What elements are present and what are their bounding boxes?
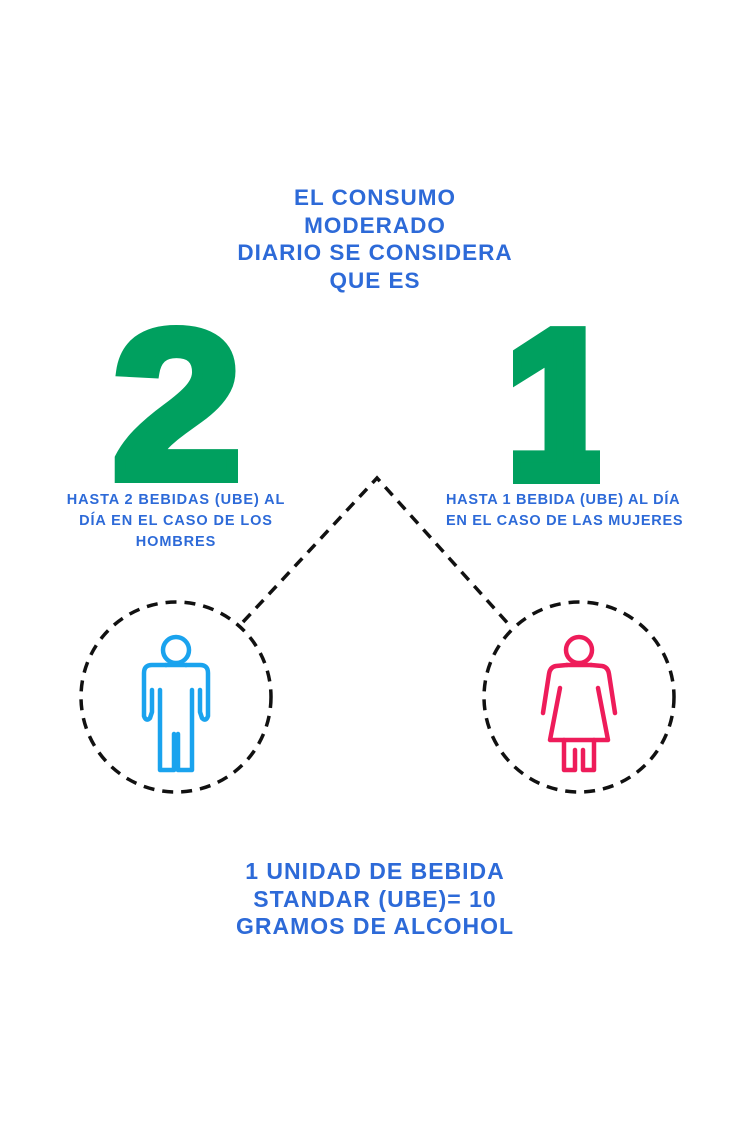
- dashed circle: women: [484, 602, 674, 792]
- title: MODERADO: [304, 212, 446, 238]
- caption: men: DÍA EN EL CASO DE LOS: [79, 513, 273, 529]
- title: QUE ES: [329, 268, 421, 292]
- icon: woman: [543, 637, 615, 770]
- footer note: 1 UNIDAD DE BEBIDA: [245, 858, 505, 884]
- icon: man: [144, 637, 208, 770]
- caption: men: HOMBRES: [136, 534, 216, 550]
- number 2: 2: [112, 287, 242, 524]
- caption: men: HASTA 2 BEBIDAS (UBE) AL: [67, 492, 285, 508]
- caption: men: [67, 492, 285, 550]
- footer note: STANDAR (UBE)= 10: [253, 886, 497, 912]
- caption: women: EN EL CASO DE LAS MUJERES: [446, 513, 683, 529]
- dashed circle: men: [81, 602, 271, 792]
- caption: women: [446, 490, 683, 529]
- title: [237, 185, 513, 292]
- connector: dashed triangle: [243, 478, 512, 628]
- number 1: 1: [501, 286, 619, 523]
- title: DIARIO SE CONSIDERA: [237, 240, 513, 265]
- footer note: [236, 858, 514, 939]
- title: EL CONSUMO: [294, 185, 456, 210]
- footer note: GRAMOS DE ALCOHOL: [236, 913, 514, 939]
- caption: women: HASTA 1 BEBIDA (UBE) AL DÍA: [446, 492, 680, 508]
- graphic: numbers, connector lines, icons: [79, 325, 676, 794]
